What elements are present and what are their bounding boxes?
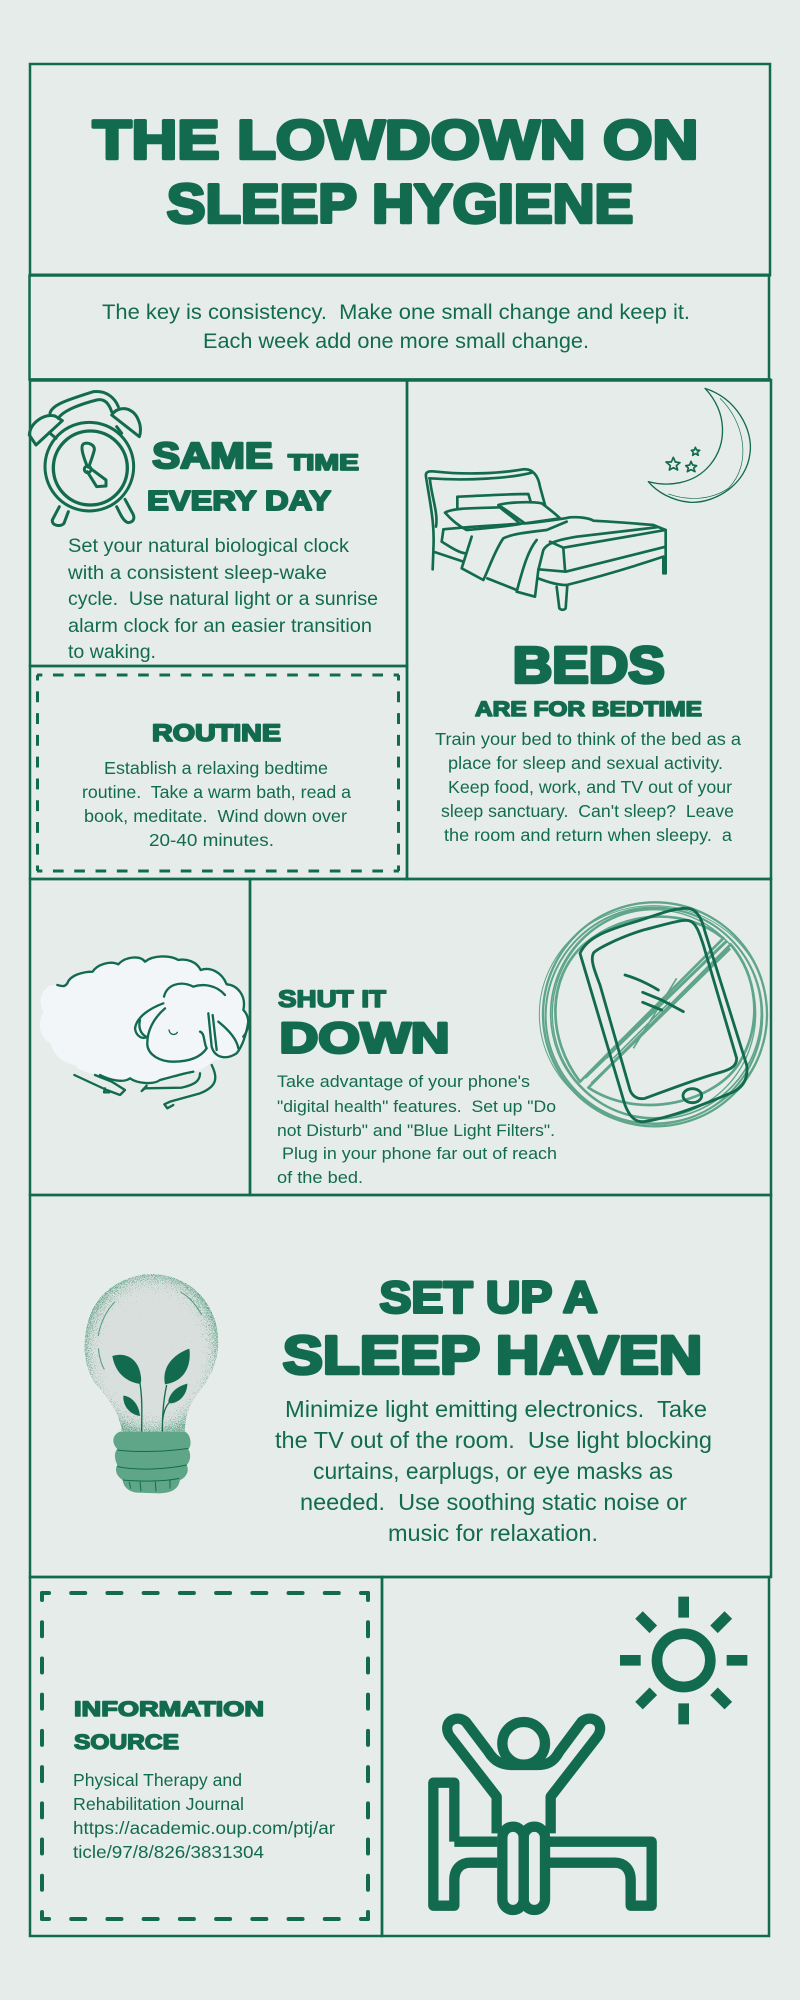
panel: shut it down [250, 879, 771, 1195]
body text: book, meditate. Wind down over [84, 806, 347, 826]
body text: with a consistent sleep-wake [67, 562, 327, 584]
heading [147, 435, 359, 516]
heading: ARE FOR BEDTIME [475, 697, 702, 721]
body text: Set your natural biological clock [68, 535, 349, 557]
heading: SLEEP HAVEN [283, 1325, 702, 1385]
intro text: The key is consistency. Make one small change and keep it. [102, 301, 690, 324]
heading: INFORMATION [74, 1696, 264, 1721]
panel: title [30, 64, 770, 275]
body text: Take advantage of your phone's [277, 1073, 530, 1091]
heading [278, 986, 450, 1062]
body text: ticle/97/8/826/3831304 [73, 1842, 264, 1862]
heading: EVERY DAY [147, 485, 331, 516]
icon: sleeping sheep [40, 956, 248, 1108]
intro text [102, 301, 690, 353]
panel: routine [30, 666, 407, 879]
body text [82, 758, 351, 850]
dashed border [42, 1593, 368, 1919]
body text: not Disturb" and "Blue Light Filters". [277, 1122, 555, 1140]
heading [475, 636, 702, 721]
panel: intro [30, 276, 769, 380]
panel: beds are for bedtime [407, 380, 771, 879]
body text: "digital health" features. Set up "Do [277, 1098, 556, 1116]
heading: BEDS [513, 636, 665, 693]
body text [435, 729, 741, 845]
section divider lines [29, 275, 771, 380]
panel: waking up [382, 1577, 769, 1936]
title [93, 108, 698, 234]
body text: curtains, earplugs, or eye masks as [313, 1458, 673, 1484]
icon: crescent moon and stars [648, 388, 750, 502]
body text: Plug in your phone far out of reach [282, 1145, 557, 1163]
heading: ROUTINE [152, 720, 281, 747]
icon: alarm clock [29, 391, 140, 526]
panel: same time every day [29, 380, 407, 666]
body text: Minimize light emitting electronics. Take [285, 1396, 707, 1422]
body text: Train your bed to think of the bed as a [435, 729, 741, 749]
heading [74, 1696, 264, 1754]
body text [73, 1770, 335, 1862]
body text: alarm clock for an easier transition [68, 615, 372, 637]
body text [275, 1396, 712, 1546]
icon: sun [620, 1597, 747, 1724]
body text: cycle. Use natural light or a sunrise [68, 588, 378, 610]
body text: routine. Take a warm bath, read a [82, 782, 351, 802]
panel: information source [30, 1577, 382, 1936]
icon: phone prohibited [539, 902, 767, 1126]
heading: SAME [152, 435, 273, 476]
heading: SHUT IT [278, 986, 386, 1013]
body text [67, 535, 378, 663]
body text: of the bed. [277, 1169, 363, 1187]
heading: DOWN [280, 1014, 450, 1062]
body text: needed. Use soothing static noise or [300, 1489, 687, 1515]
intro text: Each week add one more small change. [203, 330, 589, 353]
body text: Rehabilitation Journal [73, 1794, 244, 1814]
icon: person stretching in bed [433, 1719, 652, 1910]
body text: the room and return when sleepy. a [444, 825, 732, 845]
body text: 20-40 minutes. [149, 830, 274, 850]
body text: https://academic.oup.com/ptj/ar [73, 1818, 335, 1838]
body text [277, 1073, 557, 1187]
body text: Keep food, work, and TV out of your [448, 777, 732, 797]
heading: SOURCE [74, 1729, 179, 1754]
title: THE LOWDOWN ON [93, 108, 698, 170]
body text: Physical Therapy and [73, 1770, 242, 1790]
body text: sleep sanctuary. Can't sleep? Leave [441, 801, 734, 821]
body text: place for sleep and sexual activity. [448, 753, 723, 773]
heading [283, 1274, 702, 1385]
panel: set up a sleep haven [30, 1195, 771, 1577]
body text: to waking. [68, 641, 156, 663]
icon: light bulb with plant [84, 1274, 218, 1493]
heading: TIME [288, 450, 359, 475]
body text: music for relaxation. [388, 1520, 598, 1546]
body text: the TV out of the room. Use light blocking [275, 1427, 712, 1453]
icon: bed [426, 469, 666, 610]
title: SLEEP HYGIENE [167, 172, 633, 234]
heading: SET UP A [380, 1274, 598, 1322]
panel: sheep [30, 879, 250, 1195]
dashed border [37, 675, 399, 871]
body text: Establish a relaxing bedtime [104, 758, 328, 778]
